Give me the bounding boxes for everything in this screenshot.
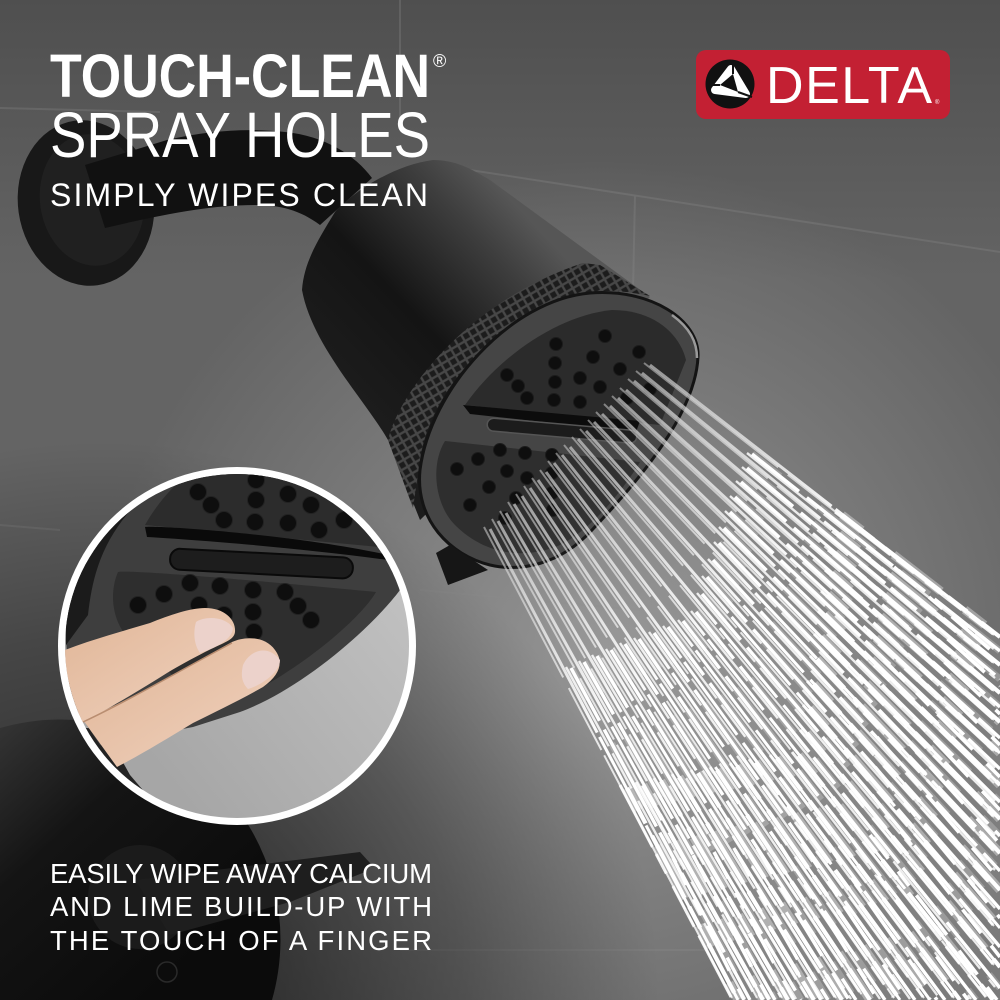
Delta logo: DELTA	[766, 57, 932, 115]
caption: AND LIME BUILD-UP WITH	[50, 891, 432, 922]
inset slot	[145, 527, 388, 560]
subtitle: SIMPLY WIPES CLEAN	[50, 177, 428, 213]
rim highlight	[672, 315, 697, 358]
shower head	[302, 160, 698, 585]
title: TOUCH-CLEAN	[50, 42, 430, 110]
title	[50, 42, 446, 171]
caption: EASILY WIPE AWAY CALCIUM	[50, 858, 432, 889]
caption	[50, 858, 432, 956]
inset circle: finger touching spray holes	[58, 462, 416, 825]
inset slot pill	[170, 548, 353, 579]
nozzles	[450, 330, 656, 524]
finger crease	[83, 643, 232, 722]
head clip tab	[436, 545, 488, 585]
inset head face	[66, 462, 400, 745]
Delta logo	[696, 50, 950, 119]
inset upper recess	[145, 474, 378, 547]
title: SPRAY HOLES	[50, 99, 430, 171]
valve disc	[0, 720, 280, 1000]
water spray	[484, 363, 1000, 1000]
center slot	[463, 405, 640, 432]
inset knurled edge	[66, 512, 129, 645]
head body	[302, 160, 650, 520]
title: ®	[433, 51, 446, 71]
spray face	[420, 292, 698, 567]
caption: THE TOUCH OF A FINGER	[50, 925, 432, 956]
logo mark	[706, 60, 754, 108]
Delta logo: ®	[935, 99, 940, 106]
inset dark wall edge	[66, 530, 110, 628]
shower arm and wall flange	[7, 111, 372, 295]
inset wall	[60, 470, 415, 825]
valve lever	[135, 852, 370, 935]
fingers	[60, 608, 280, 767]
inset lower recess	[113, 572, 376, 685]
inset nozzles	[130, 472, 352, 640]
nails	[194, 618, 233, 653]
knurled band	[388, 263, 650, 508]
lower finger	[83, 638, 280, 767]
tub valve handle	[0, 720, 370, 1000]
inset dark valve	[86, 728, 144, 790]
slot pill	[487, 418, 637, 444]
valve button	[157, 962, 177, 982]
lower nozzle zone	[436, 441, 640, 553]
upper nozzle zone	[465, 310, 686, 425]
upper finger	[60, 608, 235, 722]
valve hub	[88, 845, 192, 949]
